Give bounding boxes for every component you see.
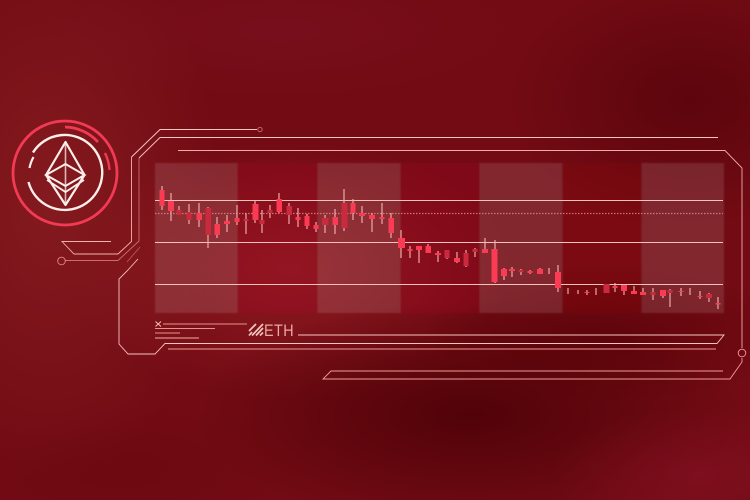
candlestick chart (160, 186, 720, 309)
hatch mark (249, 324, 263, 336)
ETH label: ETH (264, 322, 294, 340)
legend lines with cross mark (155, 322, 247, 338)
chart background bands (155, 163, 724, 313)
chart grid lines (155, 200, 723, 284)
tech frame lines (58, 127, 746, 379)
ethereum badge icon (13, 121, 117, 225)
